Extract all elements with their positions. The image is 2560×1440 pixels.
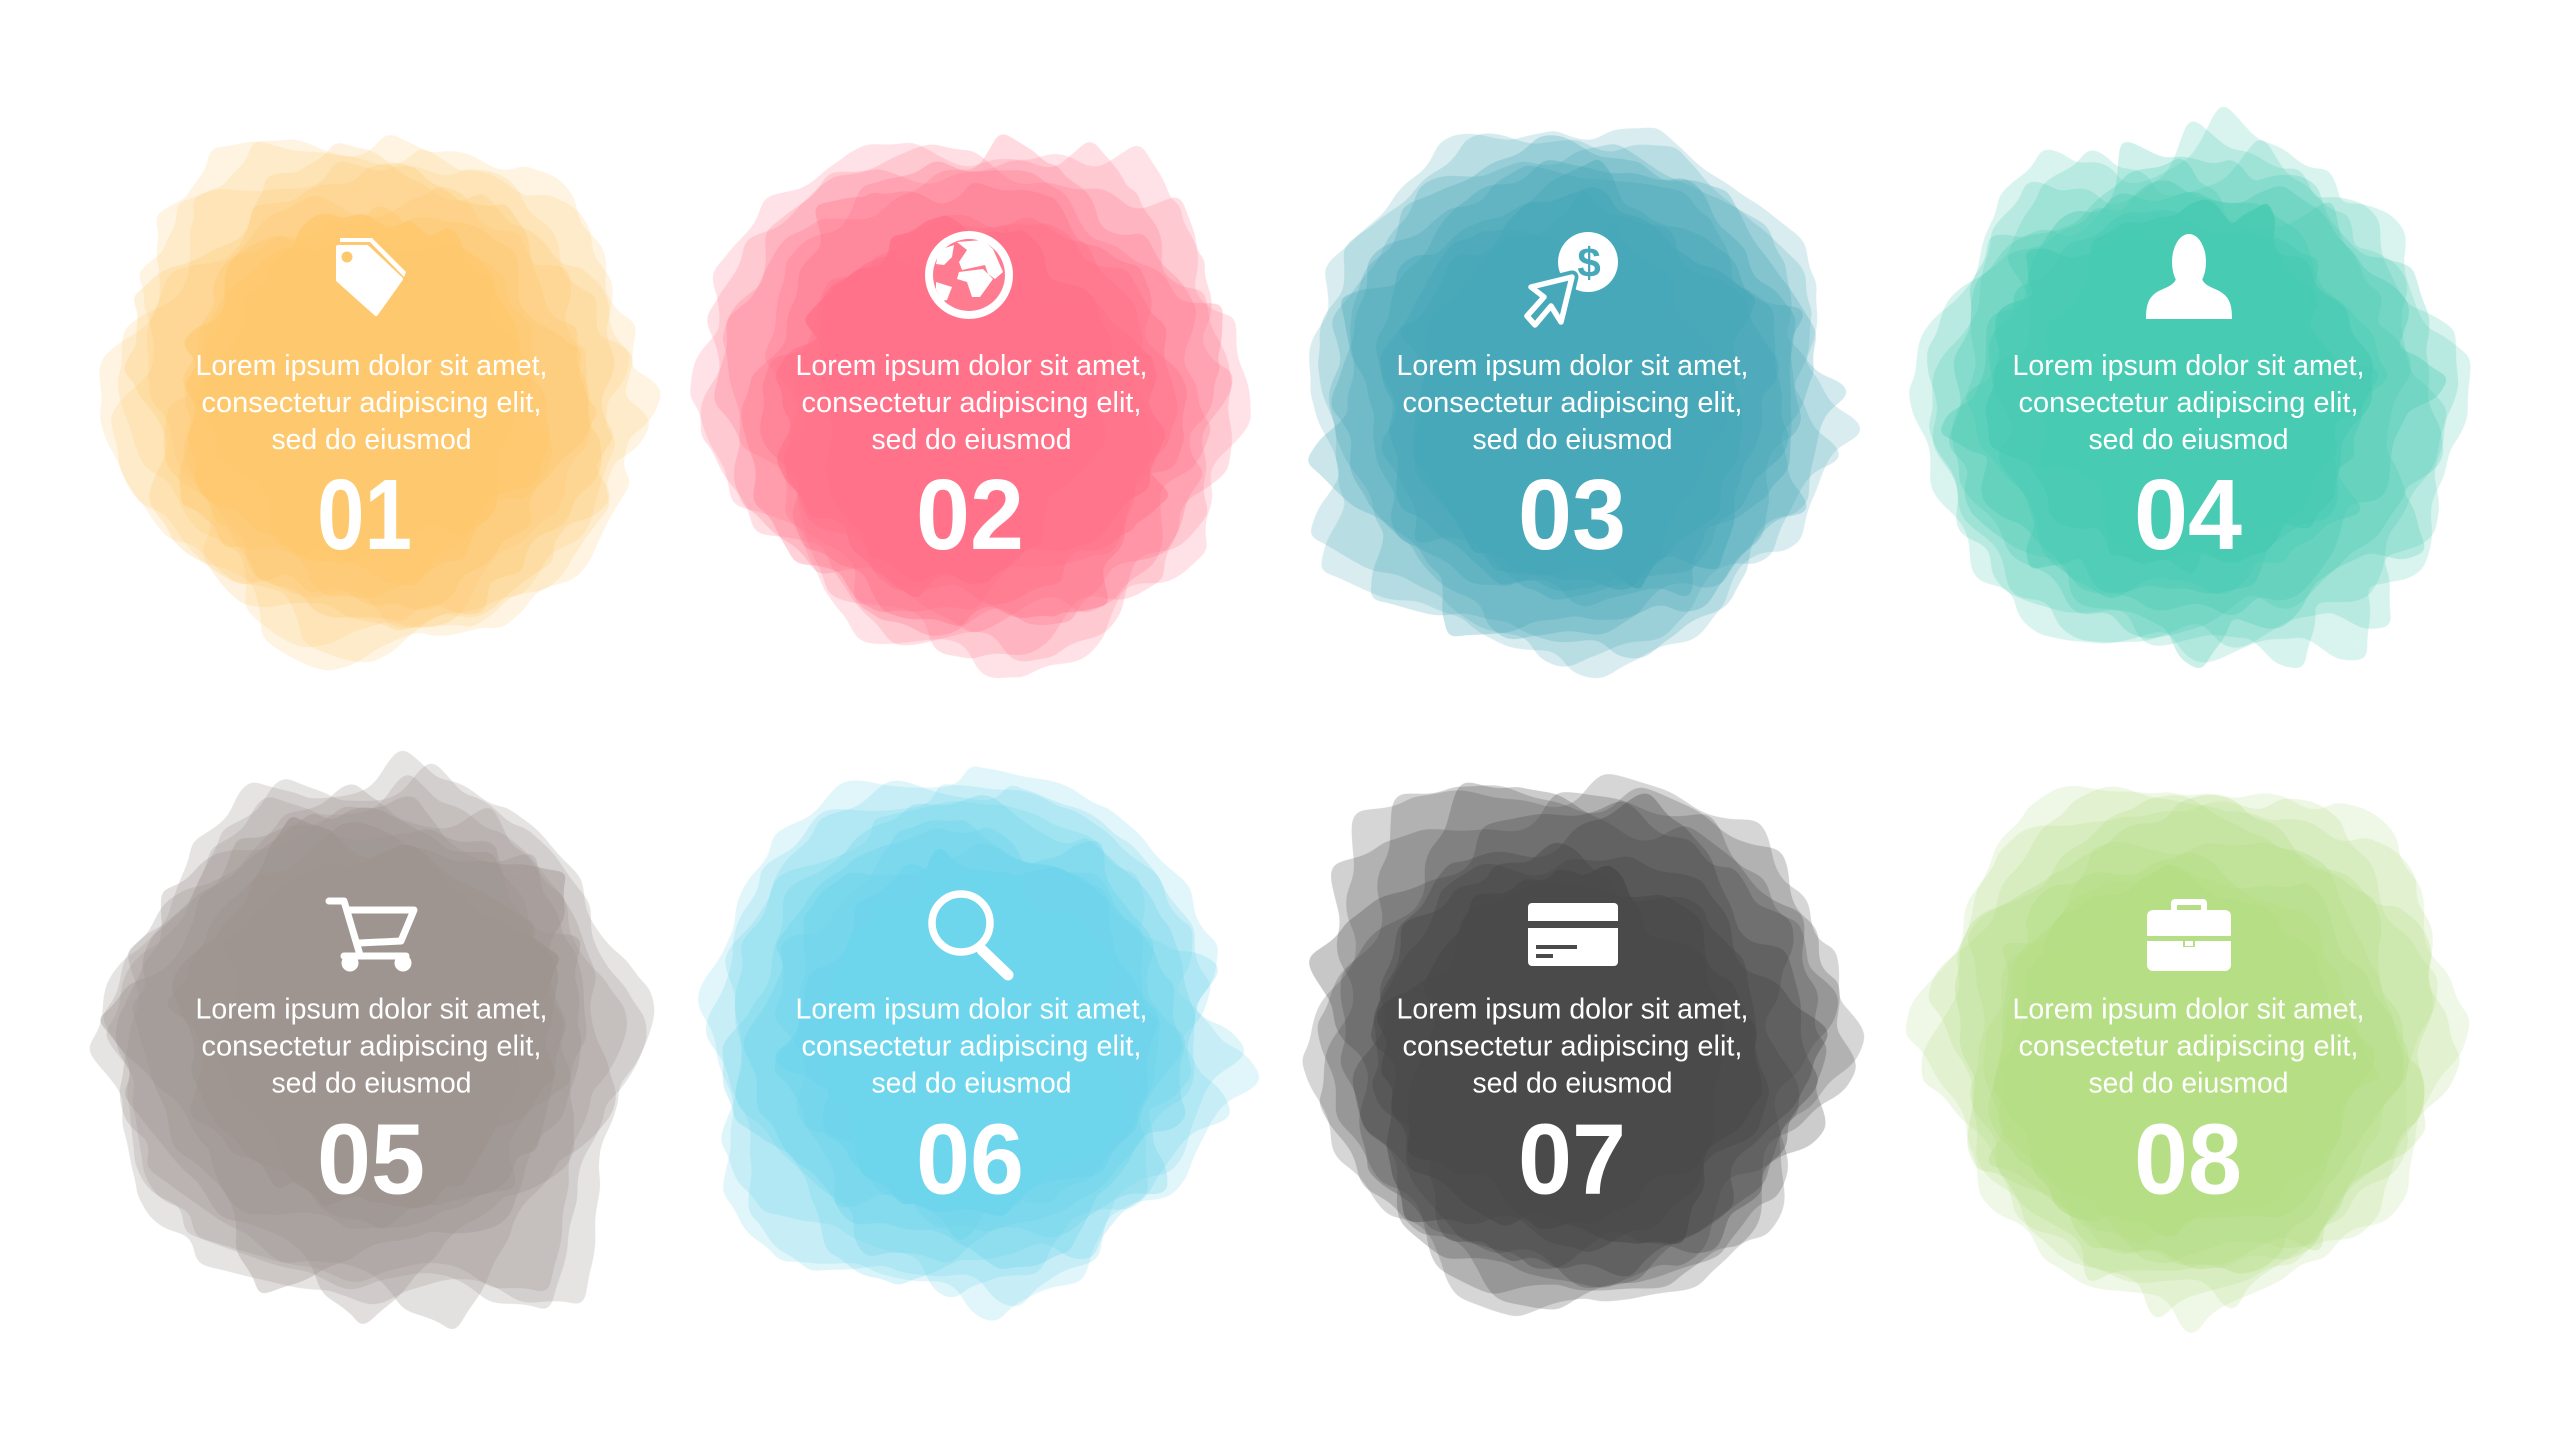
number: 06: 06 — [916, 1104, 1024, 1216]
text: step 06 description: sed do eiusmod — [872, 1068, 1072, 1100]
text: step 07 description: Lorem ipsum dolor sit amet, — [1396, 994, 1748, 1026]
text: step 04 description: Lorem ipsum dolor sit amet, — [2012, 350, 2364, 382]
text: step 04 description: sed do eiusmod — [2088, 424, 2288, 456]
text: step 05 description: consectetur adipiscing elit, — [202, 1030, 542, 1062]
text: step 03 description: sed do eiusmod — [1472, 424, 1672, 456]
panel: step 06 — [659, 713, 1299, 1361]
text: step 07 description: consectetur adipiscing elit, — [1402, 1030, 1742, 1062]
text: step 01 description: Lorem ipsum dolor sit amet, — [196, 350, 548, 382]
text: step 05 description: Lorem ipsum dolor sit amet, — [196, 994, 548, 1026]
watercolor blob: pink — [642, 80, 1299, 732]
text: step 07 description — [1396, 994, 1748, 1100]
panel: step 01 — [45, 88, 696, 733]
text: step 01 description: sed do eiusmod — [272, 424, 472, 456]
text: step 02 description: Lorem ipsum dolor sit amet, — [796, 350, 1148, 382]
icon: briefcase — [2147, 899, 2231, 971]
icon: shopping cart — [329, 901, 414, 968]
text: step 08 description: consectetur adipiscing elit, — [2018, 1030, 2358, 1062]
number: 01: 01 — [317, 459, 412, 571]
number: 07: 07 — [1518, 1104, 1626, 1216]
text: step 06 description: Lorem ipsum dolor sit amet, — [796, 994, 1148, 1026]
text: step 05 description: sed do eiusmod — [272, 1068, 472, 1100]
text: step 03 description — [1396, 350, 1748, 456]
panel: step 03 — [1258, 76, 1898, 717]
icon: credit card — [1528, 903, 1618, 966]
icon: dollar coin and cursor — [1527, 232, 1618, 325]
watercolor blob: sky blue — [659, 713, 1299, 1361]
text: step 08 description: Lorem ipsum dolor sit amet, — [2012, 994, 2364, 1026]
number: 08: 08 — [2134, 1104, 2242, 1216]
watercolor blob: charcoal — [1252, 729, 1903, 1375]
number: 03: 03 — [1518, 459, 1626, 571]
icon: globe — [925, 231, 1013, 319]
icon: magnifying glass — [932, 894, 1008, 975]
text: step 06 description: consectetur adipiscing elit, — [802, 1030, 1142, 1062]
panel: step 05 — [27, 693, 695, 1359]
text: step 03 description: Lorem ipsum dolor sit amet, — [1396, 350, 1748, 382]
panel: step 04 — [1864, 67, 2503, 708]
number: 04: 04 — [2134, 459, 2242, 571]
text: step 03 description: consectetur adipiscing elit, — [1402, 387, 1742, 419]
number: 02: 02 — [916, 459, 1024, 571]
text: step 01 description — [196, 350, 548, 456]
text: step 08 description: sed do eiusmod — [2088, 1068, 2288, 1100]
text: step 01 description: consectetur adipiscing elit, — [202, 387, 542, 419]
text: step 02 description — [796, 350, 1148, 456]
text: step 04 description — [2012, 350, 2364, 456]
text: step 08 description — [2012, 994, 2364, 1100]
watercolor blob: yellow — [45, 88, 696, 733]
text: step 06 description — [796, 994, 1148, 1100]
text: step 02 description: consectetur adipiscing elit, — [802, 387, 1142, 419]
icon: person — [2146, 234, 2232, 319]
dollar sign: $ — [1577, 239, 1601, 286]
watercolor blob: mint — [1864, 67, 2503, 708]
text: step 04 description: consectetur adipiscing elit, — [2018, 387, 2358, 419]
panel: step 08 — [1860, 731, 2507, 1376]
watercolor blob: lime green — [1860, 731, 2507, 1376]
watercolor blob: taupe — [27, 693, 695, 1359]
panel: step 02 — [642, 80, 1299, 732]
number: 05: 05 — [317, 1104, 425, 1216]
text: step 05 description — [196, 994, 548, 1100]
text: step 07 description: sed do eiusmod — [1472, 1068, 1672, 1100]
panel: step 07 — [1252, 729, 1903, 1375]
text: step 02 description: sed do eiusmod — [872, 424, 1072, 456]
icon: price tag — [338, 238, 406, 314]
watercolor blob: teal blue — [1258, 76, 1898, 717]
